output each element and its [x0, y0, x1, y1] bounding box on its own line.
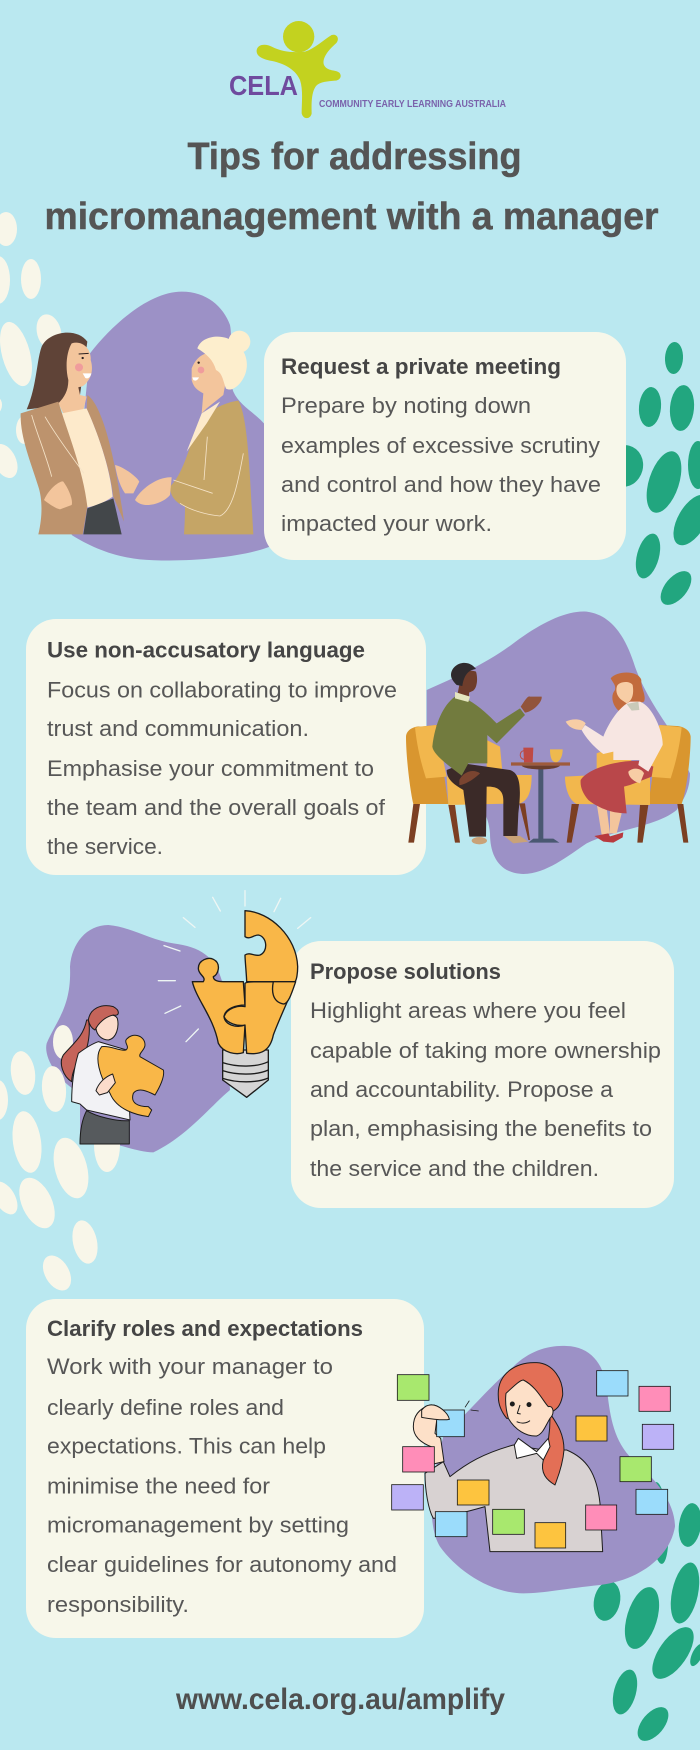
logo: CELA: COMMUNITY EARLY LEARNING AUSTRALIA — [319, 98, 506, 110]
panel: use non-accusatory language: trust and communication. — [47, 716, 309, 741]
panel: clarify roles and expectations: clearly define roles and — [47, 1395, 284, 1420]
panel: propose solutions: the service and the children. — [310, 1156, 599, 1181]
panel: request a private meeting: Prepare by noting down — [281, 393, 531, 418]
panel: clarify roles and expectations: clear guidelines for autonomy and — [47, 1552, 397, 1577]
panel: use non-accusatory language: Emphasise your commitment to — [47, 756, 374, 781]
woman with brown hair — [21, 333, 139, 534]
sticky notes — [392, 1371, 674, 1548]
panel: request a private meeting: impacted your work. — [281, 511, 492, 536]
panel: clarify roles and expectations: minimise the need for — [47, 1474, 271, 1498]
panel: request a private meeting: Request a private meeting — [281, 354, 561, 379]
panel: propose solutions: and accountability. Propose a — [310, 1077, 613, 1102]
fingers holding note — [422, 1405, 449, 1420]
panel: use non-accusatory language: the team and the overall goals of — [47, 795, 386, 820]
title — [44, 136, 659, 238]
footer url: www.cela.org.au/amplify — [175, 1683, 505, 1716]
panel: propose solutions — [291, 941, 674, 1208]
panel: clarify roles and expectations: expectations. This can help — [47, 1434, 326, 1458]
decoration: cream dots top left — [0, 212, 65, 482]
illustration: woman holding puzzle piece and jigsaw light bulb — [61, 891, 311, 1144]
coffee table with cups — [511, 748, 570, 843]
panel: clarify roles and expectations — [26, 1299, 424, 1638]
panel: request a private meeting: examples of excessive scrutiny — [281, 433, 601, 458]
panel: use non-accusatory language: Use non-accusatory language — [47, 638, 365, 662]
logo: CELA: CELA — [229, 70, 298, 101]
woman in red skirt — [566, 673, 663, 843]
woman with red hair — [413, 1363, 603, 1552]
decoration: green dots bottom right — [590, 1481, 700, 1746]
logo: CELA — [229, 21, 506, 118]
right armchair — [565, 725, 691, 843]
purple blob 1 — [72, 292, 277, 560]
panel: propose solutions: Propose solutions — [310, 959, 501, 984]
title: micromanagement with a manager — [44, 196, 659, 238]
panel: request a private meeting: and control and how they have — [281, 472, 601, 497]
man in green sweater — [432, 663, 542, 844]
woman with blonde hair — [135, 331, 253, 534]
illustration: two people talking in armchairs — [406, 663, 691, 844]
woman with puzzle piece — [61, 1006, 164, 1144]
decoration: green dots right — [600, 342, 700, 610]
purple blob 3 — [46, 925, 230, 1152]
panel: request a private meeting — [264, 332, 626, 560]
jigsaw light bulb — [192, 911, 298, 1097]
purple blob 2 — [427, 612, 690, 874]
panel: use non-accusatory language — [26, 619, 426, 875]
panel: clarify roles and expectations: micromanagement by setting — [47, 1512, 349, 1538]
panel: propose solutions: capable of taking more ownership — [310, 1038, 661, 1063]
panel: clarify roles and expectations: responsibility. — [47, 1592, 189, 1617]
panel: clarify roles and expectations: Clarify roles and expectations — [47, 1316, 363, 1341]
panel: use non-accusatory language: the service. — [47, 834, 163, 859]
illustration: woman with sticky notes — [392, 1346, 675, 1593]
panel: propose solutions: plan, emphasising the benefits to — [310, 1116, 652, 1141]
panel: propose solutions: Highlight areas where you feel — [310, 998, 626, 1023]
title: Tips for addressing — [188, 136, 522, 178]
rays — [158, 891, 311, 1042]
decoration: cream dots lower left — [0, 1025, 120, 1295]
panel: use non-accusatory language: Focus on collaborating to improve — [47, 678, 397, 702]
illustration: two women shaking hands — [21, 292, 277, 560]
left armchair — [406, 725, 532, 843]
panel: clarify roles and expectations: Work with your manager to — [47, 1354, 333, 1379]
purple blob 4 — [432, 1346, 675, 1593]
